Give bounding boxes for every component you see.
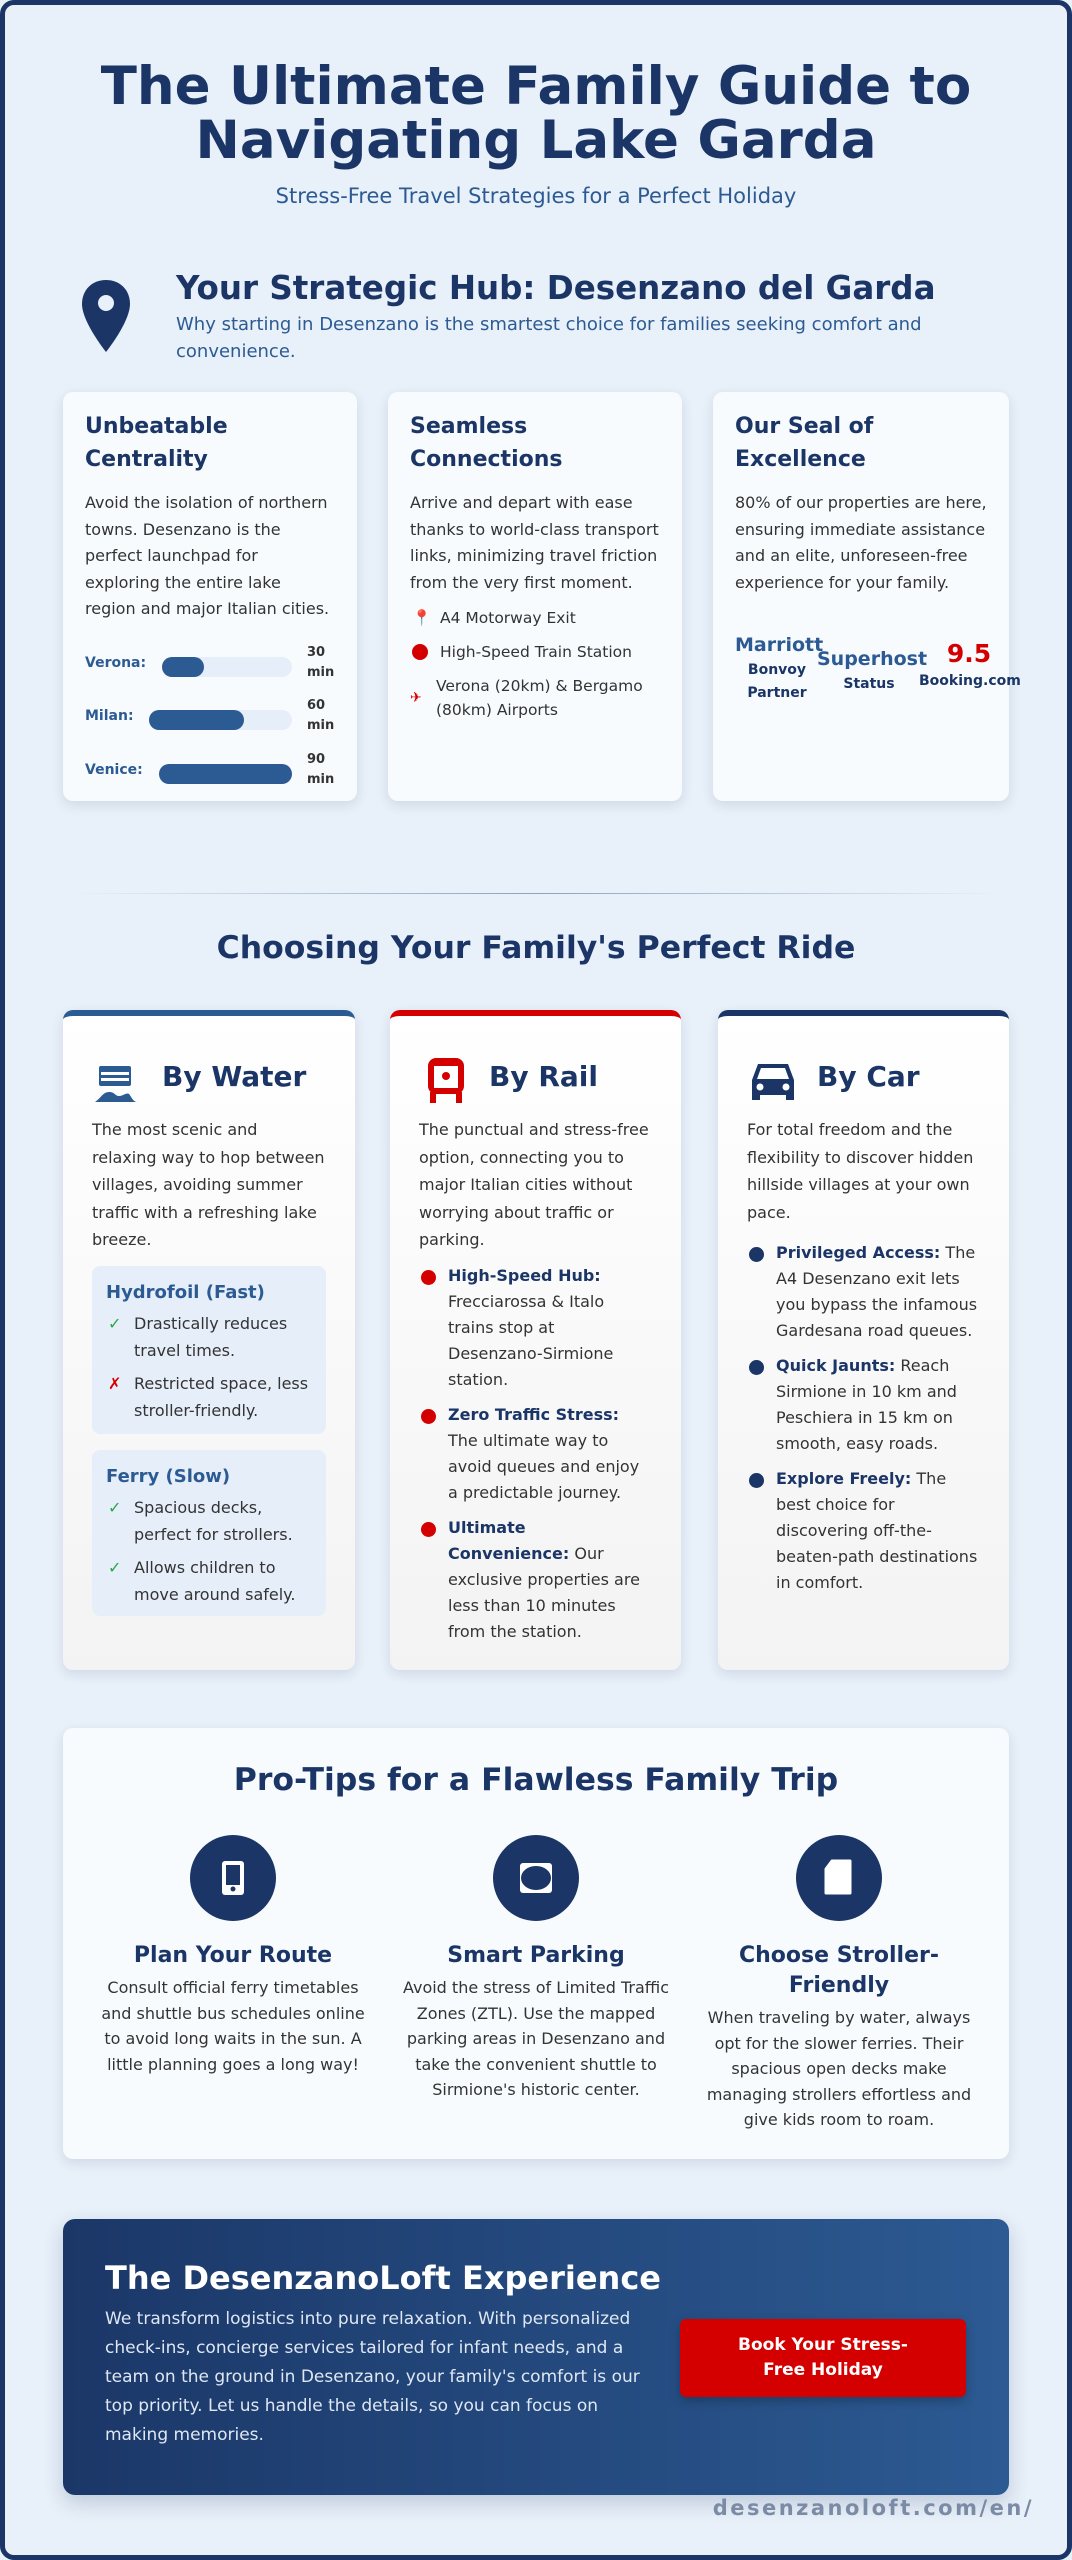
- button: Book Your Stress-: [738, 2335, 908, 2355]
- panel: by rail: [390, 1010, 681, 1670]
- bar chart: travel times: 30: [307, 644, 325, 660]
- panel: by rail: High-Speed Hub: Frecciarossa & Italo trains stop at Desenzano-Sirmione station.: [448, 1266, 613, 1388]
- tip: smart parking: Avoid the stress of Limited Traffic Zones (ZTL). Use the mapped parking areas in Desenzano and take the convenient shuttle to Sirmione's historic center.: [403, 1978, 669, 2099]
- tip: stroller friendly: When traveling by water, always opt for the slower ferries. Their spacious open decks make managing strollers effortless and give kids room to roam.: [707, 2008, 971, 2129]
- hydrofoil box: Restricted space, less stroller-friendly.: [134, 1374, 308, 1420]
- section heading: rides: Choosing Your Family's Perfect Ride: [217, 930, 855, 966]
- panel: seal of excellence: 80% of our properties are here, ensuring immediate assistance and an elite, unforeseen-free experience for your family.: [735, 493, 987, 592]
- tip: stroller friendly: [707, 1835, 971, 2129]
- bar chart: travel times: Verona:: [85, 654, 146, 670]
- panel: by car: Explore Freely: The best choice for discovering off-the-beaten-path destinations in comfort.: [776, 1469, 977, 1592]
- panel: by car: Quick Jaunts: Reach Sirmione in 10 km and Peschiera in 15 km on smooth, easy roads.: [776, 1356, 957, 1453]
- hub heading: Your Strategic Hub: Desenzano del Garda: [176, 269, 936, 307]
- panel: CTA experience: [63, 2219, 1009, 2495]
- tip: smart parking: Smart Parking: [447, 1943, 625, 1968]
- panel: connections: Seamless Connections: [410, 414, 562, 472]
- title: Navigating Lake Garda: [195, 110, 877, 171]
- icon: motorway: A4 Motorway Exit: [440, 609, 576, 627]
- panel: by car: Privileged Access: The A4 Desenzano exit lets you bypass the infamous Gardesana road queues.: [776, 1243, 977, 1340]
- footer url: desenzanoloft.com/en/: [713, 2496, 1034, 2520]
- subtitle: Stress-Free Travel Strategies for a Perfect Holiday: [276, 184, 796, 208]
- tip: plan route: Consult official ferry timetables and shuttle bus schedules online to avoid long waits in the sun. A little planning goes a long way!: [101, 1978, 365, 2074]
- hydrofoil box: ✗: [108, 1374, 121, 1392]
- panel: by car: For total freedom and the flexibility to discover hidden hillside villages at your own pace.: [747, 1120, 973, 1222]
- panel: centrality: Unbeatable Centrality: [85, 414, 228, 472]
- panel: by car: [718, 1010, 1009, 1670]
- badges: Status: [843, 676, 895, 692]
- ferry box: Spacious decks, perfect for strollers.: [134, 1498, 293, 1544]
- panel: connections: Arrive and depart with ease thanks to world-class transport links, minimizing travel friction from the very first moment.: [410, 493, 659, 592]
- heading: By Water: [162, 1060, 306, 1093]
- panel: by water: The most scenic and relaxing way to hop between villages, avoiding summer traffic with a refreshing lake breeze.: [92, 1120, 325, 1249]
- bar chart: travel times: min: [307, 772, 334, 786]
- icon: train: [428, 1058, 464, 1103]
- bar chart: travel times: min: [307, 664, 334, 680]
- ferry box: ✓: [108, 1558, 121, 1576]
- heading: Pro-Tips for a Flawless Family Trip: [234, 1762, 838, 1798]
- panel: centrality: Avoid the isolation of northern towns. Desenzano is the perfect launchpad for exploring the entire lake region and major Italian cities.: [85, 493, 329, 618]
- panel: by rail: Zero Traffic Stress: The ultimate way to avoid queues and enjoy a predictable journey.: [448, 1404, 639, 1502]
- icon: plane: Verona (20km) & Bergamo (80km) Airports: [436, 677, 643, 719]
- ferry box: Ferry (Slow): [106, 1466, 230, 1486]
- bar chart: travel times: [85, 644, 334, 786]
- panel: by rail: Ultimate Convenience: Our exclusive properties are less than 10 minutes from the station.: [448, 1518, 640, 1640]
- icon: train: High-Speed Train Station: [440, 643, 632, 661]
- tip: stroller friendly: Choose Stroller-: [739, 1943, 939, 1968]
- button: [680, 2319, 966, 2397]
- badges: Booking.com: [919, 673, 1021, 689]
- hydrofoil box: [92, 1266, 326, 1434]
- icon: motorway: 📍: [412, 609, 431, 627]
- bar chart: travel times: Milan:: [85, 708, 134, 724]
- icon: boat: [95, 1066, 137, 1102]
- panel: seal of excellence: Our Seal of Excellence: [735, 414, 873, 472]
- heading: By Rail: [489, 1060, 598, 1093]
- title: [101, 56, 971, 171]
- CTA heading: The DesenzanoLoft Experience: [105, 2259, 661, 2297]
- ferry box: ✓: [108, 1498, 121, 1516]
- tip: plan route: Plan Your Route: [134, 1943, 332, 1968]
- hydrofoil box: ✓: [108, 1314, 121, 1332]
- panel: connections: [388, 392, 682, 801]
- panel: by water: [63, 1010, 355, 1670]
- icon: plane: ✈: [410, 690, 422, 706]
- bar chart: travel times: 90: [307, 752, 325, 766]
- badges: [735, 634, 1021, 701]
- ferry box: Allows children to move around safely.: [134, 1558, 295, 1604]
- CTA text: We transform logistics into pure relaxation. With personalized check-ins, concierge services tailored for infant needs, and a team on the ground in Desenzano, your family's comfort is our top priority. Let us handle the details, so you can focus on making memories.: [105, 2309, 640, 2445]
- bar chart: travel times: Venice:: [85, 762, 143, 778]
- button: Free Holiday: [763, 2360, 883, 2380]
- hydrofoil box: Drastically reduces travel times.: [134, 1314, 287, 1360]
- badges: Marriott: [735, 634, 823, 656]
- icon: location pin: [82, 280, 130, 352]
- badges: Partner: [747, 685, 807, 701]
- badges: 9.5: [947, 639, 991, 668]
- icon: car: [752, 1064, 794, 1100]
- panel: by rail: The punctual and stress-free option, connecting you to major Italian cities without worrying about traffic or parking.: [419, 1120, 649, 1249]
- panel: centrality: [63, 392, 357, 801]
- tip: stroller friendly: Friendly: [789, 1973, 889, 1998]
- tip: smart parking: [403, 1835, 669, 2099]
- title: The Ultimate Family Guide to: [101, 56, 971, 117]
- hub subtitle: Why starting in Desenzano is the smartest choice for families seeking comfort and convenience.: [176, 314, 922, 362]
- bar chart: travel times: min: [307, 718, 334, 732]
- tip: plan route: [101, 1835, 365, 2074]
- heading: By Car: [817, 1060, 920, 1093]
- bar chart: travel times: 60: [307, 698, 325, 712]
- badges: Bonvoy: [748, 662, 806, 678]
- panel: pro tips: [63, 1728, 1009, 2159]
- panel: seal of excellence: [713, 392, 1009, 801]
- hydrofoil box: Hydrofoil (Fast): [106, 1282, 265, 1302]
- ferry box: [92, 1450, 326, 1616]
- badges: Superhost: [817, 648, 927, 670]
